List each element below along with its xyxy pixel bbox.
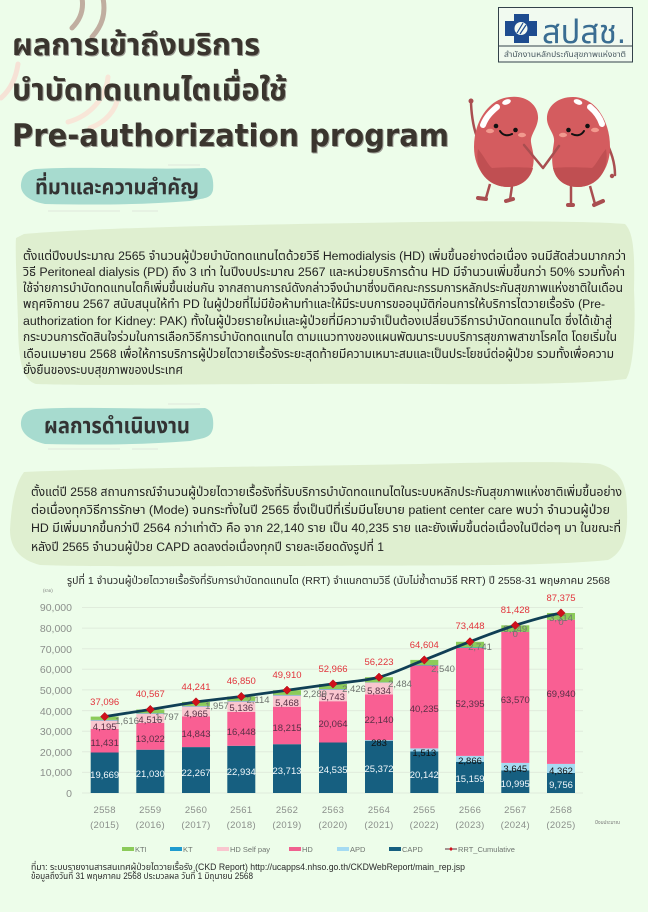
heading: results (21, 404, 213, 449)
x axis labels: (2017) (181, 820, 211, 831)
value labels: 5,834 (367, 686, 391, 697)
KT (91, 632, 529, 720)
value labels: 1,513 (412, 748, 436, 759)
value labels: 2,540 (431, 664, 455, 675)
value labels: 3,314 (549, 613, 573, 624)
value labels: 1,616 (115, 716, 139, 727)
legend: KT (183, 845, 193, 854)
panel: background text: ตั้งแต่ปีงบประมาณ 2565 จำนวนผู้ป่วยบำบัดทดแทนไตด้วยวิธี Hemodialysis (HD) เพิ่มขึ้นอย่างต่อเนื่อง จนมีสัดส่วนมากกว่า (23, 247, 626, 263)
cumulative totals: 87,375 (546, 593, 576, 604)
heading: background: ที่มาและความสำคัญ (35, 172, 199, 199)
x axis labels: (2019) (272, 820, 302, 831)
value labels: 20,064 (318, 719, 348, 730)
cumulative totals: 64,604 (410, 640, 439, 651)
panel: results text: ต่อเนื่องทุกวิธีการรักษา (Mode) จนกระทั่งในปี 2565 ซึ่งเป็นปีที่เริ่มมีนโยบาย patient center care พบว่า จำนวนผู้ป่วย (31, 501, 610, 517)
legend: APD (350, 845, 366, 854)
cumulative totals: 81,428 (501, 605, 530, 616)
decorative arcs (1, 0, 118, 128)
x axis labels: 2567 (504, 805, 526, 816)
x axis labels: (2016) (136, 820, 165, 831)
x axis labels: (2021) (364, 820, 394, 831)
value labels: 4,195 (93, 722, 117, 733)
x axis labels: 2560 (185, 805, 207, 816)
cumulative totals: 44,241 (181, 682, 211, 693)
y axis: (ราย) (43, 588, 53, 593)
x axis labels: ปีงบประมาณ (595, 820, 620, 826)
x axis labels: (2023) (455, 820, 485, 831)
value labels: 21,030 (136, 769, 165, 780)
value labels: 18,215 (272, 723, 302, 734)
panel: background text: ใช้จ่ายการบำบัดทดแทนไตก็เพิ่มขึ้นเช่นกัน จากสถานการณ์ดังกล่าวจึงนำมาซึ่งมติคณะกรรมการหลักประกันสุขภาพแห่งชาติในเดือน (23, 279, 623, 295)
value labels: 0 (513, 629, 518, 640)
panel: results text: หลังปี 2565 จำนวนผู้ป่วย CAPD ลดลงต่อเนื่องทุกปี รายละเอียดดังรูปที่ 1 (31, 538, 384, 554)
value labels: 22,140 (364, 715, 394, 726)
cumulative totals: 49,910 (272, 670, 302, 681)
value labels: 11,431 (91, 738, 119, 749)
HD (91, 620, 575, 764)
x axis labels: 2561 (230, 805, 252, 816)
logo (498, 8, 632, 62)
panel: background text: ยั่งยืนของระบบสุขภาพของประเทศ (23, 362, 183, 377)
value labels: 4,965 (184, 709, 208, 720)
y axis: 0 (66, 788, 72, 800)
value labels: 19,669 (90, 770, 119, 781)
x axis labels: 2564 (368, 805, 390, 816)
right kidney (547, 97, 615, 205)
panel: background text: กระบวนการตัดสินใจร่วมในการเลือกวิธีการบำบัดทดแทนไต ตามแนวทางของแผนพัฒนาระบบบริการสุขภาพสาขาโรคไต โดยเริ่มใน (23, 329, 617, 344)
value labels: 5,468 (275, 698, 299, 709)
cumulative totals: 73,448 (455, 621, 485, 632)
legend: HD Self pay (230, 845, 270, 854)
x axis labels: (2015) (90, 820, 119, 831)
x axis labels: (2025) (546, 820, 576, 831)
cumulative totals: 40,567 (136, 689, 165, 700)
x axis labels: 2563 (322, 805, 344, 816)
chart title: รูปที่ 1 จำนวนผู้ป่วยไตวายเรื้อรังที่รับการบำบัดทดแทนไต (RRT) จำแนกตามวิธี (นับไม่ซ้ำตามวิธี RRT) ปี 2558-31 พฤษภาคม 2568 (67, 573, 610, 587)
value labels: 2,289 (303, 689, 327, 700)
value labels: 24,535 (318, 765, 348, 776)
panel: results text: HD มีเพิ่มมากขึ้นกว่าปี 2564 กว่าเท่าตัว คือ จาก 22,140 ราย เป็น 40,235 ราย และยังเพิ่มขึ้นต่อเนื่องในปีต่อๆ มา ในขณะที่ (31, 519, 621, 535)
cumulative totals: 52,966 (318, 664, 348, 675)
value labels: 0 (558, 617, 564, 628)
title (12, 29, 449, 154)
value labels: 2,426 (342, 684, 366, 695)
value labels: 2,484 (388, 679, 412, 690)
value labels: 1,797 (155, 712, 179, 723)
value labels: 25,372 (364, 764, 394, 775)
value labels: 4,516 (138, 715, 162, 726)
y axis: 70,000 (40, 644, 72, 656)
x axis labels: (2024) (501, 820, 530, 831)
x axis labels: 2558 (94, 805, 116, 816)
y axis: 40,000 (40, 706, 72, 718)
value labels: 13,022 (136, 734, 165, 745)
value labels: 15,159 (455, 774, 485, 785)
y axis: 80,000 (40, 623, 72, 635)
joined hands (524, 145, 559, 168)
icon: blue cross (505, 14, 537, 43)
legend: HD (302, 845, 313, 854)
x axis labels: (2022) (410, 820, 439, 831)
cumulative totals: 56,223 (364, 657, 394, 668)
panel: background text: พฤศจิกายน 2567 สนับสนุนให้ทำ PD ในผู้ป่วยที่ไม่มีข้อห้ามทำและให้มีระบบการขออนุมัติก่อนการให้บริการไตวายเรื้อรัง (Pre- (23, 295, 605, 311)
value labels: 9,756 (549, 780, 573, 791)
panel: background text: authorization for Kidney: PAK) ทั้งในผู้ป่วยรายใหม่และผู้ป่วยที่มีความจำเป็นต้องเปลี่ยนวิธีการบำบัดทดแทนไต ซึ่งได้เข้าสู่ (23, 312, 612, 328)
cumulative totals (90, 593, 576, 708)
cumulative RRT line (100, 609, 565, 721)
panel: background text: วิธี Peritoneal dialysis (PD) ถึง 3 เท่า ในปีงบประมาณ 2567 และหน่วยบริการด้าน HD มีจำนวนเพิ่มขึ้นกว่า 50% รวมทั้งค่า (22, 263, 625, 279)
value labels: 10,995 (501, 779, 530, 790)
panel: background text: เดือนเมษายน 2568 เพื่อให้การบริการผู้ป่วยไตวายเรื้อรังระยะสุดท้ายมีความเหมาะสมและเป็นประโยชน์ต่อผู้ป่วย รวมทั้งเพื่อความ (23, 345, 614, 361)
value labels: 1,957 (205, 701, 229, 712)
value labels: 40,235 (410, 704, 439, 715)
source note: ข้อมูลถึงวันที่ 31 พฤษภาคม 2568 ประมวลผล วันที่ 1 มิถุนายน 2568 (31, 869, 253, 882)
cumulative totals: 37,096 (90, 697, 119, 708)
y axis: 10,000 (40, 767, 72, 779)
illustration: two kidneys holding hands (468, 97, 615, 205)
logo wordmark: สปสช. (542, 13, 626, 50)
x axis labels: 2562 (276, 805, 298, 816)
value labels: 4,362 (549, 766, 573, 777)
value labels: 63,570 (501, 695, 530, 706)
x axis labels: (2018) (227, 820, 256, 831)
HD self pay (91, 682, 393, 729)
value labels: 2,114 (246, 695, 270, 706)
value labels: 2,866 (458, 756, 482, 767)
panel: results text: ตั้งแต่ปี 2558 สถานการณ์จำนวนผู้ป่วยไตวายเรื้อรังที่รับบริการบำบัดทดแทนไตในระบบหลักประกันสุขภาพแห่งชาติเพิ่มขึ้นอย่าง (31, 483, 622, 499)
legend: KTI (135, 845, 147, 854)
value labels: 22,267 (181, 768, 211, 779)
value labels: 3,645 (503, 764, 527, 775)
stacked bar chart (40, 588, 620, 854)
y axis: 20,000 (40, 747, 72, 759)
value labels (90, 613, 576, 791)
bars (91, 613, 575, 793)
value labels: 14,843 (181, 729, 211, 740)
value labels: 5,136 (229, 703, 253, 714)
heading: background (21, 165, 213, 211)
logo caption: สำนักงานหลักประกันสุขภาพแห่งชาติ (504, 50, 626, 60)
y axis (40, 588, 583, 800)
title: ผลการเข้าถึงบริการ (12, 29, 260, 62)
value labels: 69,940 (546, 689, 576, 700)
source note (31, 860, 465, 882)
value labels: 16,448 (227, 727, 256, 738)
y axis: 60,000 (40, 664, 72, 676)
legend (122, 845, 515, 854)
y axis: 90,000 (40, 602, 72, 614)
value labels: 22,934 (227, 767, 256, 778)
value labels: 52,395 (455, 699, 485, 710)
panel: background text (16, 221, 635, 385)
left kidney (468, 97, 538, 201)
cumulative totals: 46,850 (227, 676, 256, 687)
title: Pre-authorization program (12, 118, 449, 154)
x axis labels: (2020) (318, 820, 348, 831)
y axis: 50,000 (40, 685, 72, 697)
x axis labels: 2565 (413, 805, 435, 816)
APD (365, 740, 575, 773)
panel: results text (10, 462, 627, 566)
value labels: 20,142 (410, 770, 439, 781)
value labels: 283 (371, 738, 387, 749)
CAPD (91, 741, 575, 793)
heading: results: ผลการดำเนินงาน (44, 413, 190, 438)
x axis labels: 2566 (459, 805, 481, 816)
x axis labels: 2568 (550, 805, 572, 816)
title: บำบัดทดแทนไตเมื่อใช้ (12, 68, 287, 107)
source note: ที่มา: ระบบรายงานสารสนเทศผู้ป่วยไตวายเรื้อรัง (CKD Report) http://ucapps4.nhso.go.th/CKDWebReport/main_rep.jsp (31, 860, 465, 873)
legend: RRT_Cumulative (458, 845, 515, 854)
legend: CAPD (402, 845, 423, 854)
x axis labels (90, 805, 620, 831)
y axis: 30,000 (40, 726, 72, 738)
value labels: 5,743 (321, 692, 345, 703)
value labels: 2,741 (468, 642, 492, 653)
KTI (91, 613, 575, 720)
value labels: 3,149 (503, 624, 527, 635)
x axis labels: 2559 (139, 805, 161, 816)
value labels: 23,713 (272, 766, 302, 777)
